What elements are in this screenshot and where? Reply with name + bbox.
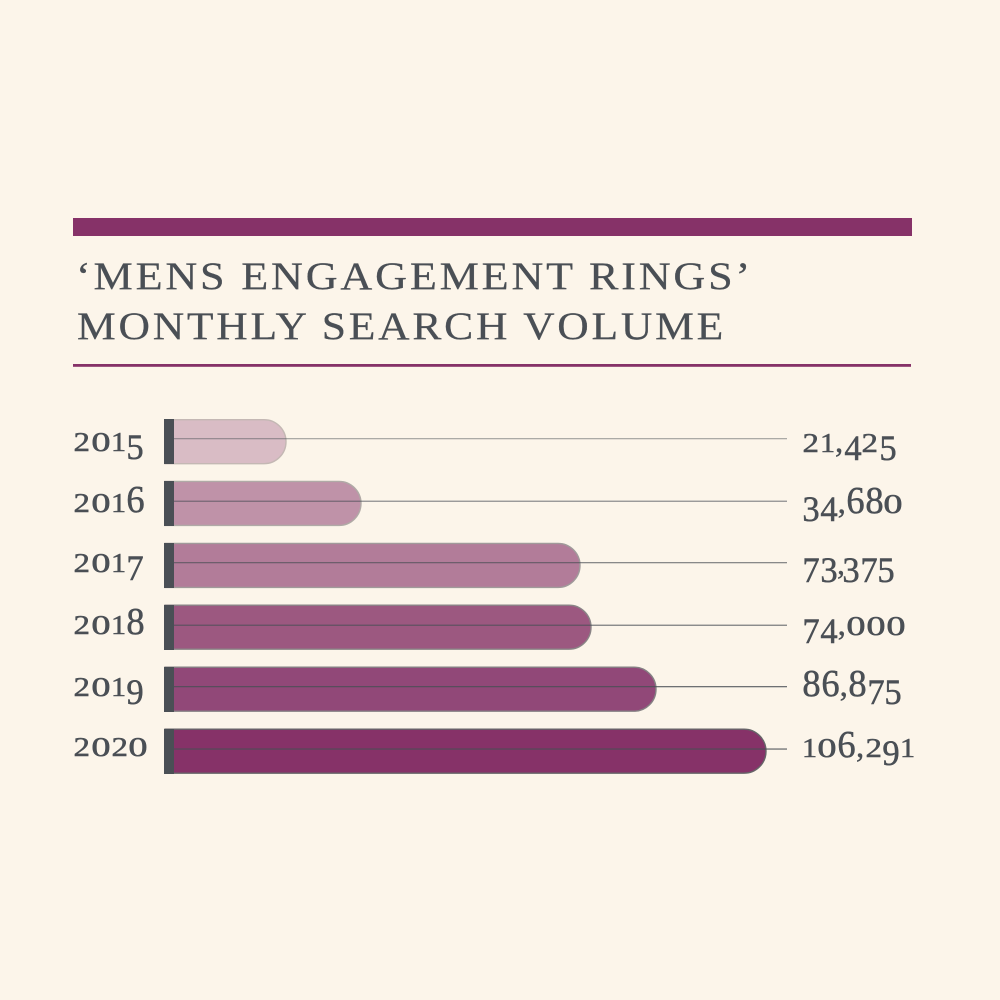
year label 2017: 7	[126, 548, 143, 588]
year label 2020: 2	[74, 732, 90, 762]
year label 2016	[74, 479, 144, 521]
value 21,425	[803, 423, 896, 468]
year label 2018	[74, 601, 144, 643]
year label 2015: 1	[111, 427, 126, 457]
bar 2019	[164, 667, 787, 712]
bar 2018	[164, 605, 787, 650]
year label 2019	[74, 672, 143, 712]
heading rule	[73, 364, 911, 367]
year label 2017: 1	[111, 548, 126, 578]
bar 2015	[164, 419, 787, 464]
value 34,680	[802, 480, 903, 529]
title line 2: MONTHLY SEARCH VOLUME	[77, 304, 726, 348]
year label 2020: 2	[111, 732, 128, 762]
value 74,000: 0	[887, 611, 906, 641]
value 73,375: 3	[820, 550, 837, 590]
value 106,291: 9	[883, 733, 900, 773]
year label 2020	[74, 732, 148, 762]
year label 2018: 1	[111, 610, 126, 640]
value 74,000: 0	[847, 611, 866, 641]
year label 2020: 0	[129, 732, 148, 762]
year label 2019: 2	[74, 672, 90, 702]
value 73,375: 5	[878, 550, 895, 590]
year label 2016: 1	[111, 488, 126, 518]
year label 2020: 0	[91, 732, 110, 762]
value 86,875: 7	[867, 672, 884, 712]
title line 1: ‘MENS ENGAGEMENT RINGS’	[76, 254, 753, 298]
bar chart	[164, 419, 787, 774]
year label 2016: 6	[126, 479, 144, 521]
year label 2018: 8	[126, 601, 144, 643]
value 34,680: 3	[802, 489, 820, 529]
year label 2015: 2	[74, 427, 90, 457]
value 21,425: 4	[844, 428, 861, 468]
value 86,875: 8	[849, 663, 867, 705]
value 34,680: 4	[820, 489, 837, 529]
value 73,375	[802, 548, 895, 590]
value 34,680: 8	[865, 480, 883, 522]
value 73,375: ,	[837, 548, 845, 581]
year label 2017: 0	[91, 548, 110, 578]
value 106,291	[802, 724, 915, 773]
year label 2015: 5	[126, 427, 143, 467]
value 21,425: 1	[820, 428, 835, 458]
value 86,875	[802, 663, 902, 712]
year label 2015: 0	[91, 427, 110, 457]
value 106,291: 1	[802, 733, 817, 763]
value 34,680: 6	[847, 480, 865, 522]
value 74,000: 7	[802, 611, 820, 651]
year label 2017	[74, 548, 143, 588]
value 73,375: 7	[802, 550, 820, 590]
value 106,291: ,	[856, 728, 864, 764]
year label 2019: 1	[111, 672, 126, 702]
title	[76, 254, 753, 348]
value 74,000: 4	[820, 611, 837, 651]
value 106,291: 1	[900, 733, 915, 763]
value 86,875: 6	[821, 663, 839, 705]
year label 2017: 2	[74, 548, 90, 578]
value 106,291: 0	[817, 733, 837, 763]
value 74,000: ,	[838, 606, 846, 642]
value 74,000	[802, 606, 906, 651]
year label 2019: 0	[91, 672, 110, 702]
value 34,680: 0	[884, 489, 903, 519]
bar 2016	[164, 481, 787, 526]
value 74,000: 0	[867, 611, 886, 641]
bar 2020	[164, 729, 787, 774]
value 86,875: 5	[885, 672, 902, 712]
value 21,425: ,	[835, 423, 843, 459]
year label 2015	[74, 427, 143, 467]
year label 2018: 2	[74, 610, 90, 640]
value 21,425: 2	[862, 428, 878, 458]
year label 2018: 0	[91, 610, 110, 640]
value 106,291: 2	[865, 733, 882, 763]
value 73,375: 7	[860, 550, 877, 590]
top heading bar	[73, 218, 912, 236]
value 34,680: ,	[838, 484, 846, 520]
year label 2019: 9	[126, 672, 143, 712]
value 21,425: 5	[879, 428, 896, 468]
bar 2017	[164, 543, 787, 588]
year label 2016: 2	[74, 488, 90, 518]
value 73,375: 3	[843, 550, 860, 590]
value 86,875: ,	[840, 667, 848, 703]
value 21,425: 2	[803, 428, 819, 458]
year label 2016: 0	[91, 488, 110, 518]
value 106,291: 6	[837, 724, 856, 766]
value 86,875: 8	[802, 663, 821, 705]
